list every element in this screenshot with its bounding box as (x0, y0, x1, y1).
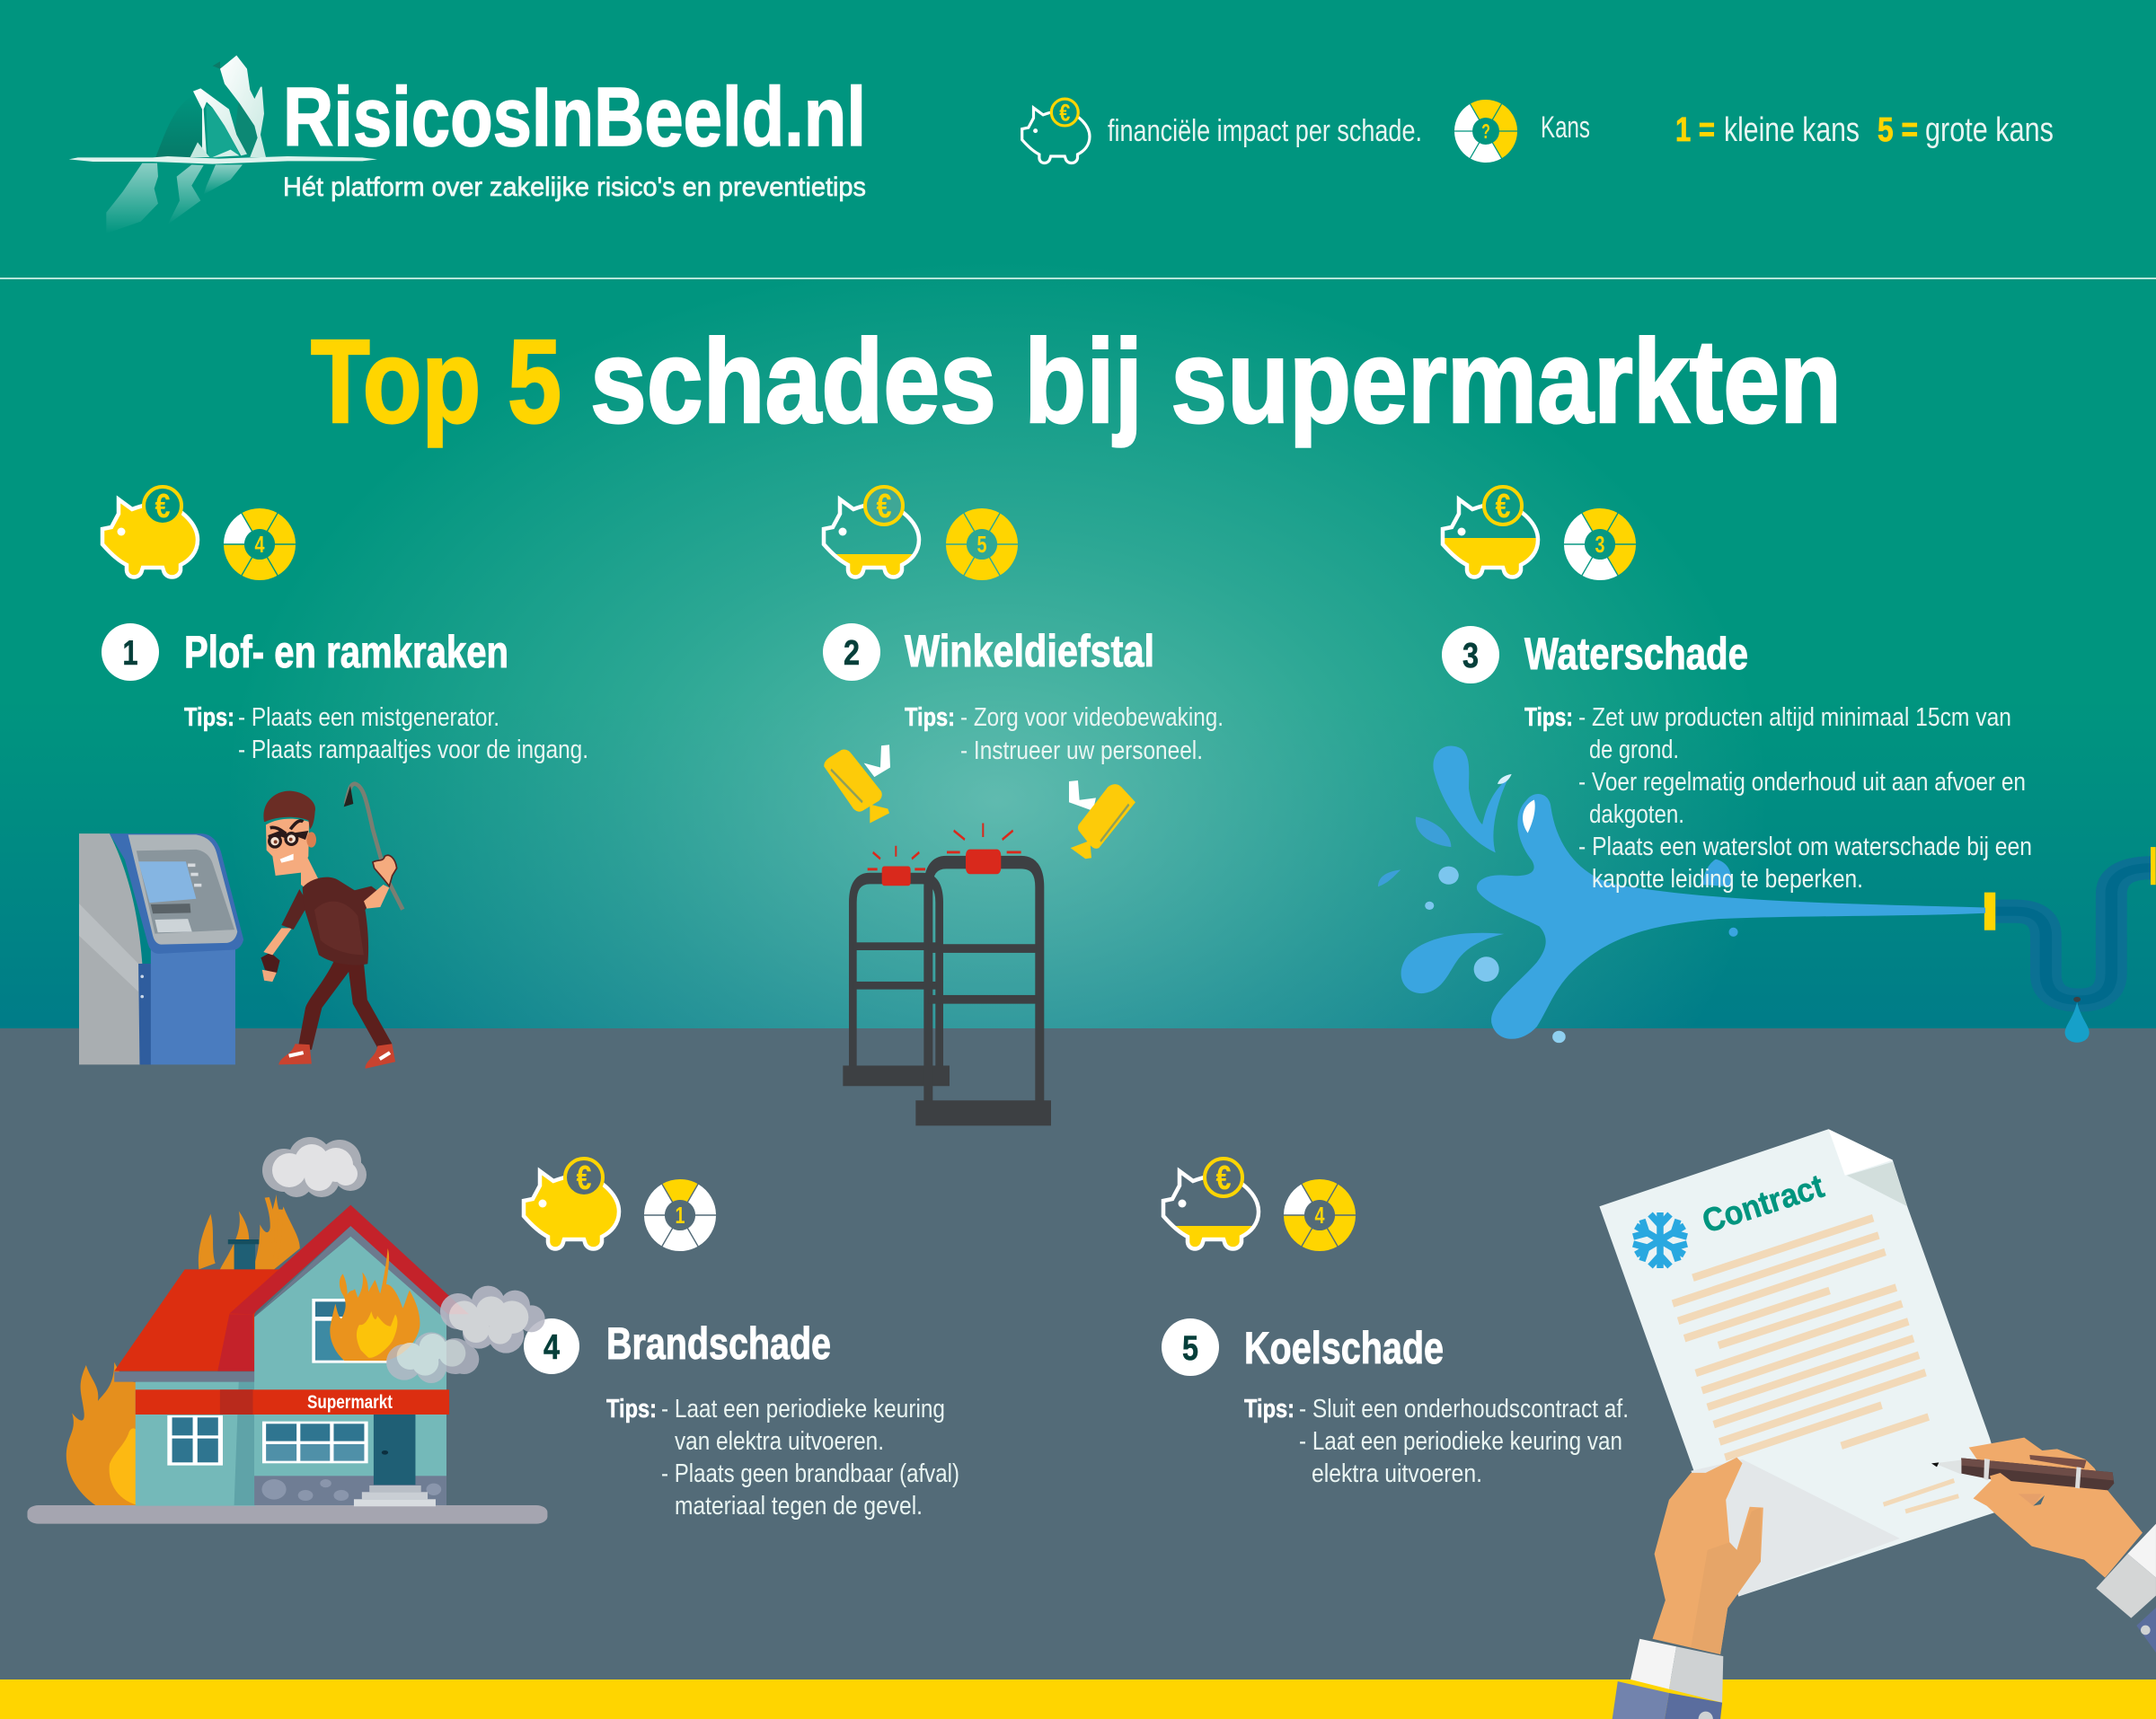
logo tagline: Hét platform over zakelijke risico's en preventietips (283, 172, 866, 202)
tips 2: - Instrueer uw personeel. (960, 736, 1203, 765)
icon: chance ring 4 (220, 508, 299, 580)
icon: piggy full (102, 487, 198, 577)
tips 1: Tips: (184, 703, 234, 732)
icon: chance ring 1 (641, 1179, 720, 1251)
icon: piggy low: € (1216, 1159, 1231, 1197)
tips 2 (905, 703, 1224, 765)
number badge 3 (1442, 626, 1499, 683)
illustration: security gates (843, 823, 1051, 1125)
number badge 1 (102, 623, 159, 681)
smoke clouds (262, 1137, 545, 1383)
number badge 4 (524, 1318, 579, 1374)
burning upper window (312, 1248, 420, 1363)
icon: chance ring 4 (1280, 1179, 1359, 1251)
tips 3: kapotte leiding te beperken. (1592, 865, 1863, 894)
tips 1: - Plaats rampaaltjes voor de ingang. (238, 736, 588, 764)
contract paper (1599, 1129, 2010, 1597)
logo (69, 56, 866, 234)
title: Top 5 (311, 315, 561, 447)
heading 3: Waterschade (1524, 629, 1748, 679)
tips 4: - Plaats geen brandbaar (afval) (661, 1459, 959, 1488)
panel: 3 waterschade (1378, 487, 2156, 1043)
legend scale (1675, 111, 2054, 149)
tips 2: Tips: (905, 703, 955, 732)
panel: 2 winkeldiefstal (823, 487, 1224, 1125)
tips 4: van elektra uitvoeren. (675, 1427, 884, 1456)
tips 3: de grond. (1589, 736, 1679, 764)
legend scale: 5 = (1878, 111, 1918, 149)
icon: chance ring 4: 4 (255, 531, 265, 558)
icon: chance ring 3 (1560, 508, 1639, 580)
tips 3: - Plaats een waterslot om waterschade bij een (1578, 833, 2032, 861)
icon: piggy half (1443, 487, 1538, 577)
icon: piggy full: € (155, 488, 171, 525)
tips 5: - Sluit een onderhoudscontract af. (1299, 1395, 1629, 1424)
logo wordmark: RisicosInBeeld.nl (283, 70, 866, 163)
illustration: burglar (261, 784, 402, 1069)
number badge 4: 4 (543, 1328, 560, 1367)
illustration: contract with hands (1599, 1129, 2156, 1719)
icon: chance ring 3: 3 (1595, 531, 1604, 558)
tips 5: Tips: (1244, 1395, 1294, 1424)
icon: chance ring 5 (942, 508, 1021, 580)
number badge 1: 1 (122, 634, 138, 673)
icon: piggy low (1163, 1159, 1259, 1248)
number badge 5: 5 (1182, 1329, 1198, 1368)
house sign text: Supermarkt (307, 1392, 393, 1413)
legend impact label: financiële impact per schade. (1108, 114, 1422, 148)
illustration: water jet and pipe (1378, 745, 2156, 1043)
title: schades bij supermarkten (590, 315, 1842, 447)
heading 4: Brandschade (606, 1318, 831, 1369)
tips 1 (184, 703, 588, 764)
tips 1: - Plaats een mistgenerator. (238, 703, 499, 732)
icon: piggy full: € (577, 1159, 591, 1197)
icon: legend piggy bank: € (1059, 99, 1070, 126)
background teal (0, 0, 2156, 1029)
legend scale: kleine kans (1724, 111, 1860, 149)
legend chance label: Kans (1541, 110, 1590, 145)
legend scale: grote kans (1925, 111, 2054, 149)
tips 3: dakgoten. (1589, 800, 1684, 829)
heading 5: Koelschade (1244, 1323, 1444, 1373)
icon: piggy low: € (877, 488, 891, 525)
icon: piggy low (824, 487, 919, 577)
left hand (1613, 1458, 1763, 1719)
burglar upper body (263, 784, 402, 965)
tips 4: Tips: (606, 1395, 657, 1424)
number badge 5 (1162, 1318, 1219, 1376)
icon: chance ring 1: 1 (676, 1202, 685, 1229)
tips 4 (606, 1395, 959, 1521)
tips 4: - Laat een periodieke keuring (661, 1395, 945, 1424)
tips 4: materiaal tegen de gevel. (675, 1492, 923, 1521)
tips 3: - Voer regelmatig onderhoud uit aan afvoer en (1578, 768, 2026, 797)
number badge 2: 2 (844, 634, 860, 673)
icon: legend chance ring (1451, 100, 1521, 163)
tips 5: - Laat een periodieke keuring van (1299, 1427, 1622, 1456)
illustration: burning supermarket (27, 1194, 547, 1524)
tips 3 (1524, 703, 2032, 894)
tips 5: elektra uitvoeren. (1312, 1459, 1482, 1488)
tips 2: - Zorg voor videobewaking. (960, 703, 1224, 732)
legend scale: 1 = (1675, 111, 1715, 149)
icon: iceberg (69, 56, 377, 234)
floor grey (0, 1028, 2156, 1679)
illustration: ATM (79, 833, 243, 1064)
tips 3: Tips: (1524, 703, 1573, 732)
icon: piggy full (524, 1159, 619, 1248)
footer bar (0, 1679, 2156, 1719)
heading 1: Plof- en ramkraken (184, 627, 508, 677)
icon: snowflake (1633, 1212, 1687, 1268)
tips 3: - Zet uw producten altijd minimaal 15cm van (1578, 703, 2011, 732)
burglar legs and glove (261, 949, 395, 1069)
heading 2: Winkeldiefstal (905, 626, 1154, 676)
right hand and pen (1931, 1438, 2156, 1653)
panel: 1 plof- en ramkraken (79, 487, 588, 1069)
icon: legend piggy bank (1022, 99, 1090, 163)
tips 5 (1244, 1395, 1629, 1488)
icon: legend chance ring: ? (1481, 119, 1490, 143)
panel: 5 koelschade (1162, 1129, 2156, 1719)
contract title: Contract (1698, 1168, 1828, 1240)
legend (1022, 99, 2054, 163)
icon: chance ring 5: 5 (977, 531, 986, 558)
icon: chance ring 4: 4 (1315, 1202, 1325, 1229)
illustration: security cameras (824, 745, 1135, 859)
panel: 4 brandschade (27, 1137, 959, 1524)
header divider (0, 278, 2156, 279)
icon: piggy half: € (1495, 488, 1511, 525)
number badge 2 (823, 623, 880, 681)
number badge 3: 3 (1462, 637, 1479, 675)
background glow (0, 180, 2156, 1029)
